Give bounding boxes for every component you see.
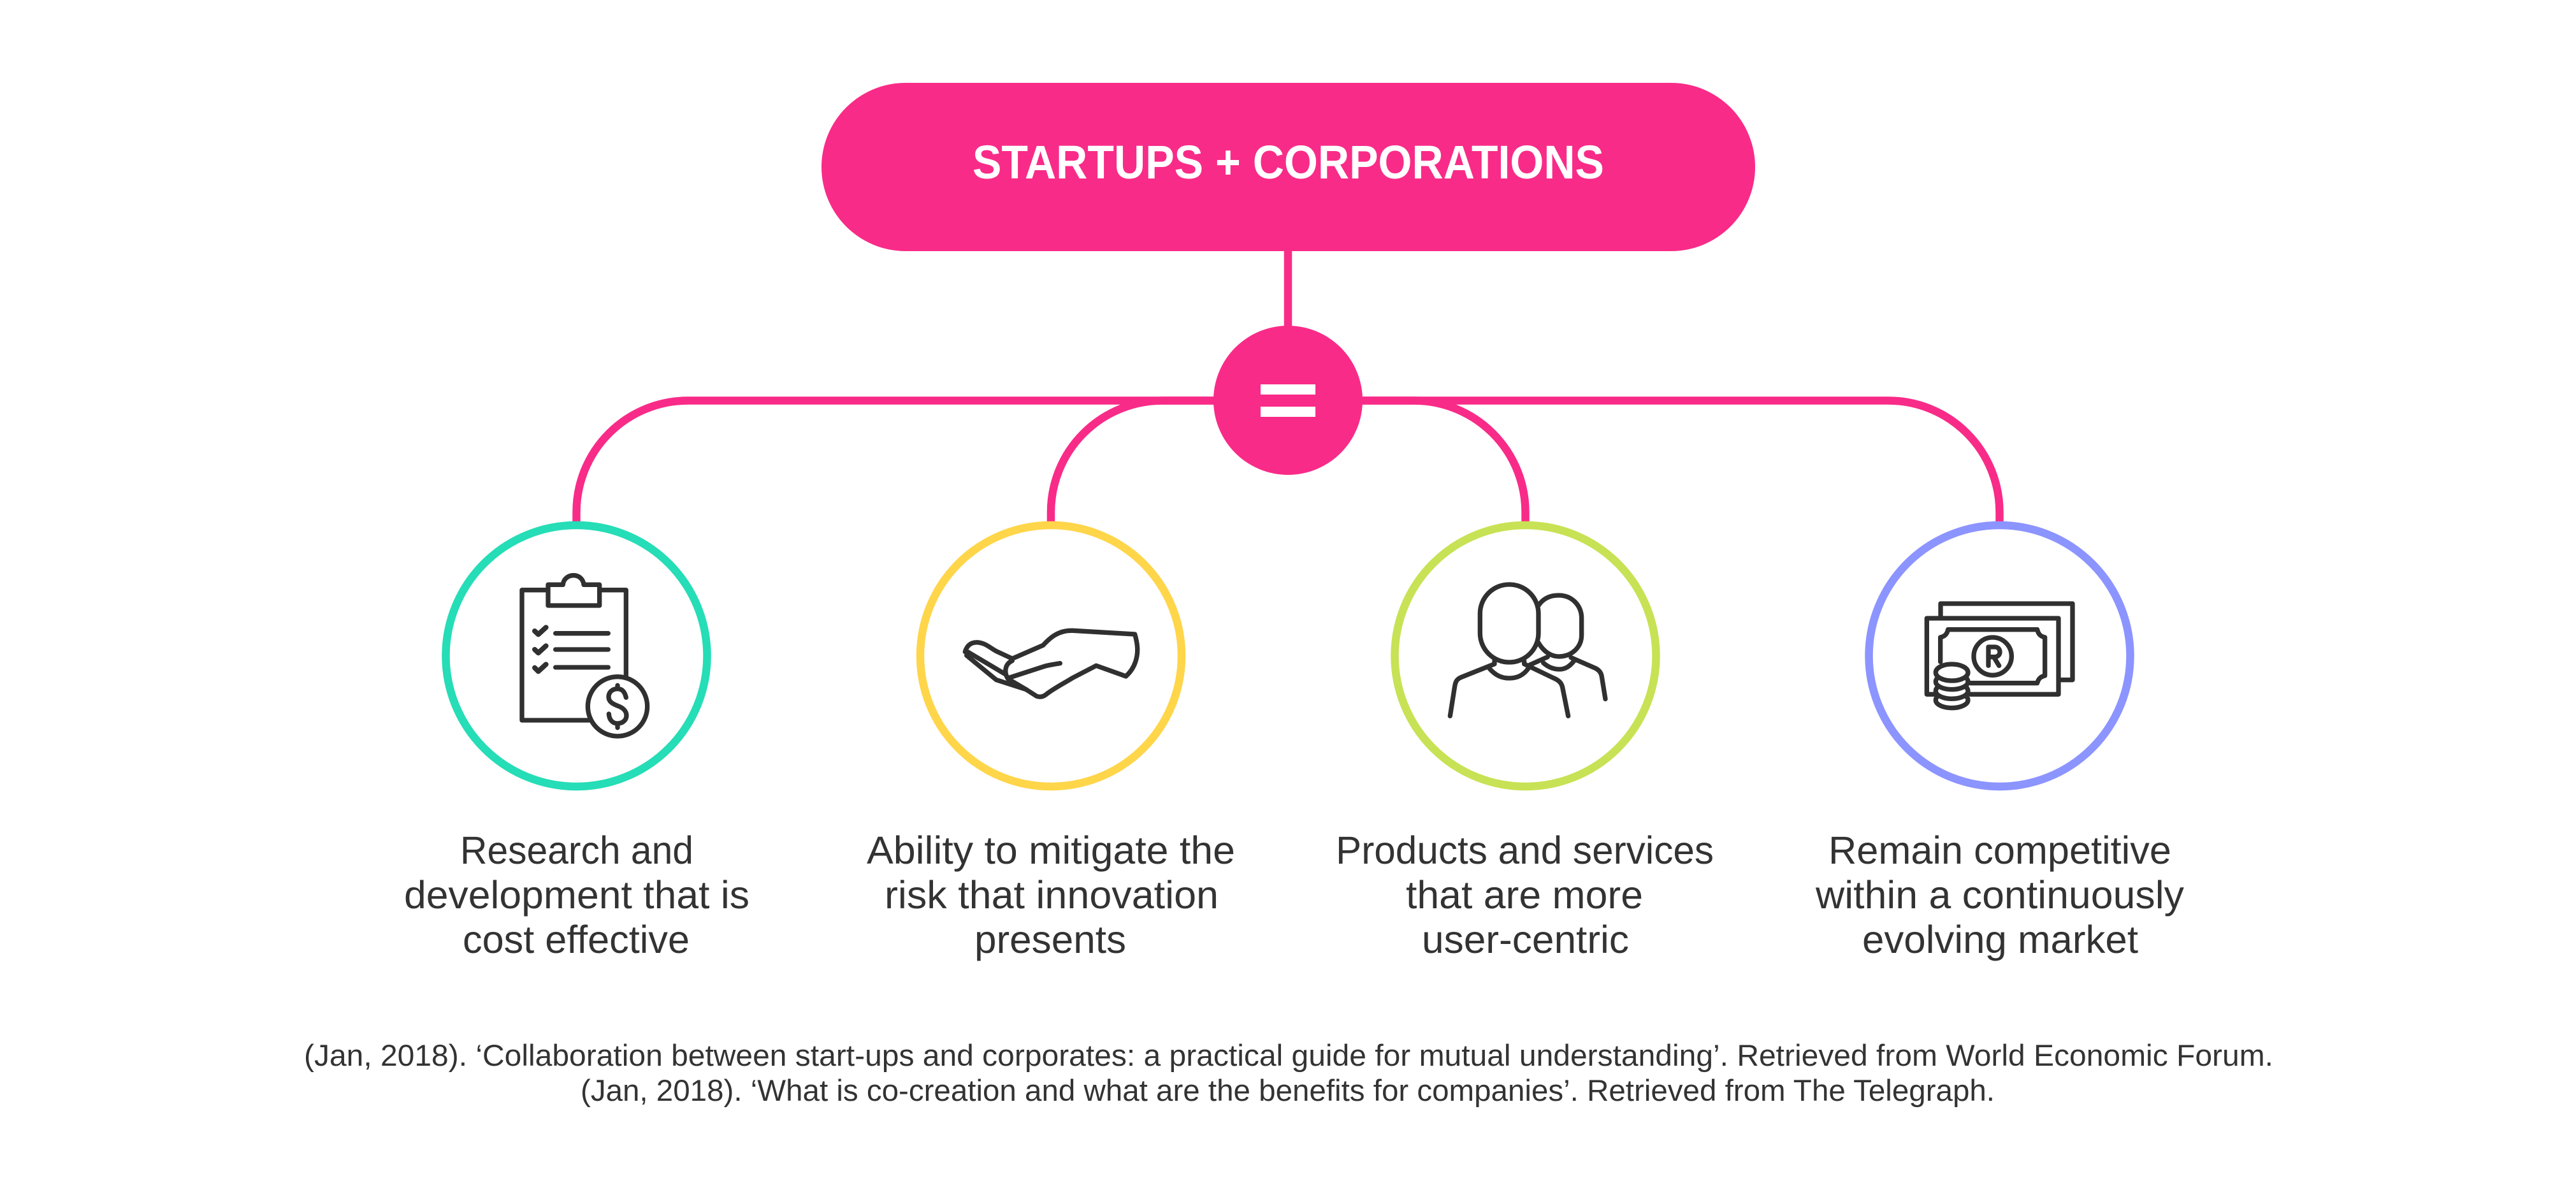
icon: banknotes and coins [1927,604,2073,708]
label: remain competitive: evolving market [1862,918,2138,961]
icon: two people [1450,584,1605,716]
label: research and development: cost effective [463,918,690,961]
icon: clipboard with dollar coin [522,576,648,736]
label: remain competitive [1815,829,2185,961]
label: risk mitigation: Ability to mitigate the [867,829,1235,872]
icon: open hand [965,630,1138,697]
title pill [821,83,1755,251]
label: remain competitive: within a continuously [1815,873,2185,917]
label: remain competitive: Remain competitive [1828,829,2171,872]
panel: research and development [404,525,749,961]
references: (Jan, 2018). ‘Collaboration between start-ups and corporates: a practical guide for mutual understanding’. Retrieved from World Economic Forum. [304,1038,2273,1072]
label: user-centric products: user-centric [1422,918,1629,961]
panel: user-centric products [1336,525,1714,961]
label: research and development: Research and [460,829,693,872]
label: research and development [404,829,749,961]
label: risk mitigation: presents [974,918,1126,961]
panel: risk mitigation [867,525,1235,961]
panel: remain competitive [1815,525,2185,961]
title text: STARTUPS + CORPORATIONS [973,136,1604,189]
references [304,1038,2273,1107]
connector lines [576,249,2000,523]
references: (Jan, 2018). ‘What is co-creation and what are the benefits for companies’. Retrieved from The Telegraph. [581,1073,1995,1107]
label: user-centric products: Products and services [1336,829,1714,872]
label: research and development: development that is [404,873,749,917]
label: user-centric products [1336,829,1714,961]
label: risk mitigation: risk that innovation [885,873,1219,917]
equals badge [1213,326,1363,475]
label: user-centric products: that are more [1406,873,1643,917]
label: risk mitigation [867,829,1235,961]
